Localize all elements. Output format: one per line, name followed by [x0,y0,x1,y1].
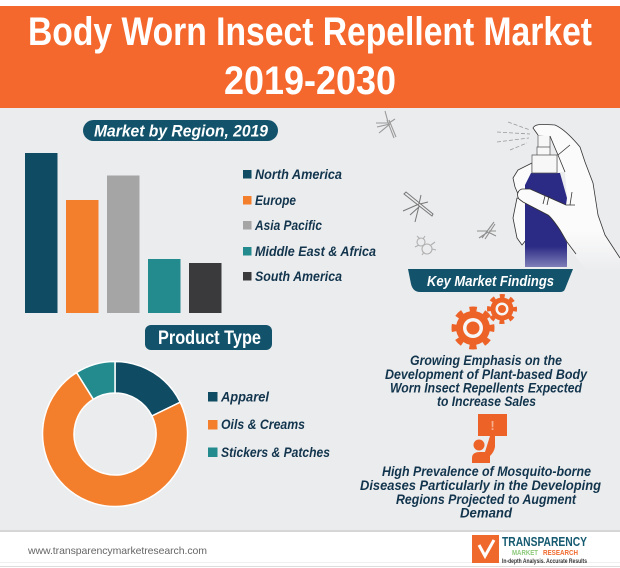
logo [472,534,588,565]
bottle collar and nozzle [532,135,557,173]
finding text 1: Growing Emphasis on the [410,352,562,368]
heading: key market findings: Key Market Findings [427,273,554,290]
legend: regions: South America [255,268,342,284]
heading: product type: Product Type [158,328,261,349]
bottle body [525,173,567,267]
logo: RESEARCH [543,550,578,557]
large gear [454,310,492,346]
finding text 2: Demand [460,504,512,520]
footer [0,530,620,568]
icon: mosquito top [376,111,396,138]
icon: mosquito middle [403,192,433,222]
legend: regions: Europe [255,192,296,208]
logo: In-depth Analysis. Accurate Results [502,559,588,565]
bar chart: market by region [25,153,222,313]
icon: gears [454,296,514,346]
hand shape [518,124,620,272]
finding text 2 [360,463,601,520]
top white strip [0,0,620,6]
finding text 1: to Increase Sales [437,393,536,409]
donut chart: product type [43,361,188,506]
finding text 1: Worn Insect Repellents Expected [390,380,582,396]
legend: product type: Apparel [220,388,270,404]
website url: www.transparencymarketresearch.com [27,545,207,557]
spray mist [497,122,530,150]
icon: hand holding spray bottle [497,122,620,272]
legend: product type: Stickers & Patches [221,444,330,460]
finding text 2: High Prevalence of Mosquito-borne [382,463,591,479]
legend: product type [208,388,330,460]
finding text 1: Development of Plant-based Body [385,366,588,382]
legend: regions: North America [255,166,342,182]
finding text 1 [385,352,588,409]
title [28,10,592,103]
legend: regions: Middle East & Africa [255,243,376,259]
icon: person holding alert sign [472,414,507,463]
icon: mosquito right [477,222,496,239]
icon: person holding alert sign: ! [490,418,495,433]
title: 2019-2030 [224,59,396,103]
logo: TRANSPARENCY [502,534,587,549]
finding text 2: Regions Projected to Augment [396,491,577,507]
small gear [490,296,514,322]
legend: regions: Asia Pacific [254,217,322,233]
back fingers [513,163,532,245]
heading: market by region: Market by Region, 2019 [94,122,269,140]
hand outline [518,124,620,258]
logo: MARKET [512,550,539,557]
heading: key market findings [408,269,573,292]
header banner [0,6,620,108]
finding text 2: Diseases Particularly in the Developing [360,477,601,493]
legend: product type: Oils & Creams [221,416,305,432]
legend: regions [243,166,376,284]
icon: bug [415,236,436,255]
